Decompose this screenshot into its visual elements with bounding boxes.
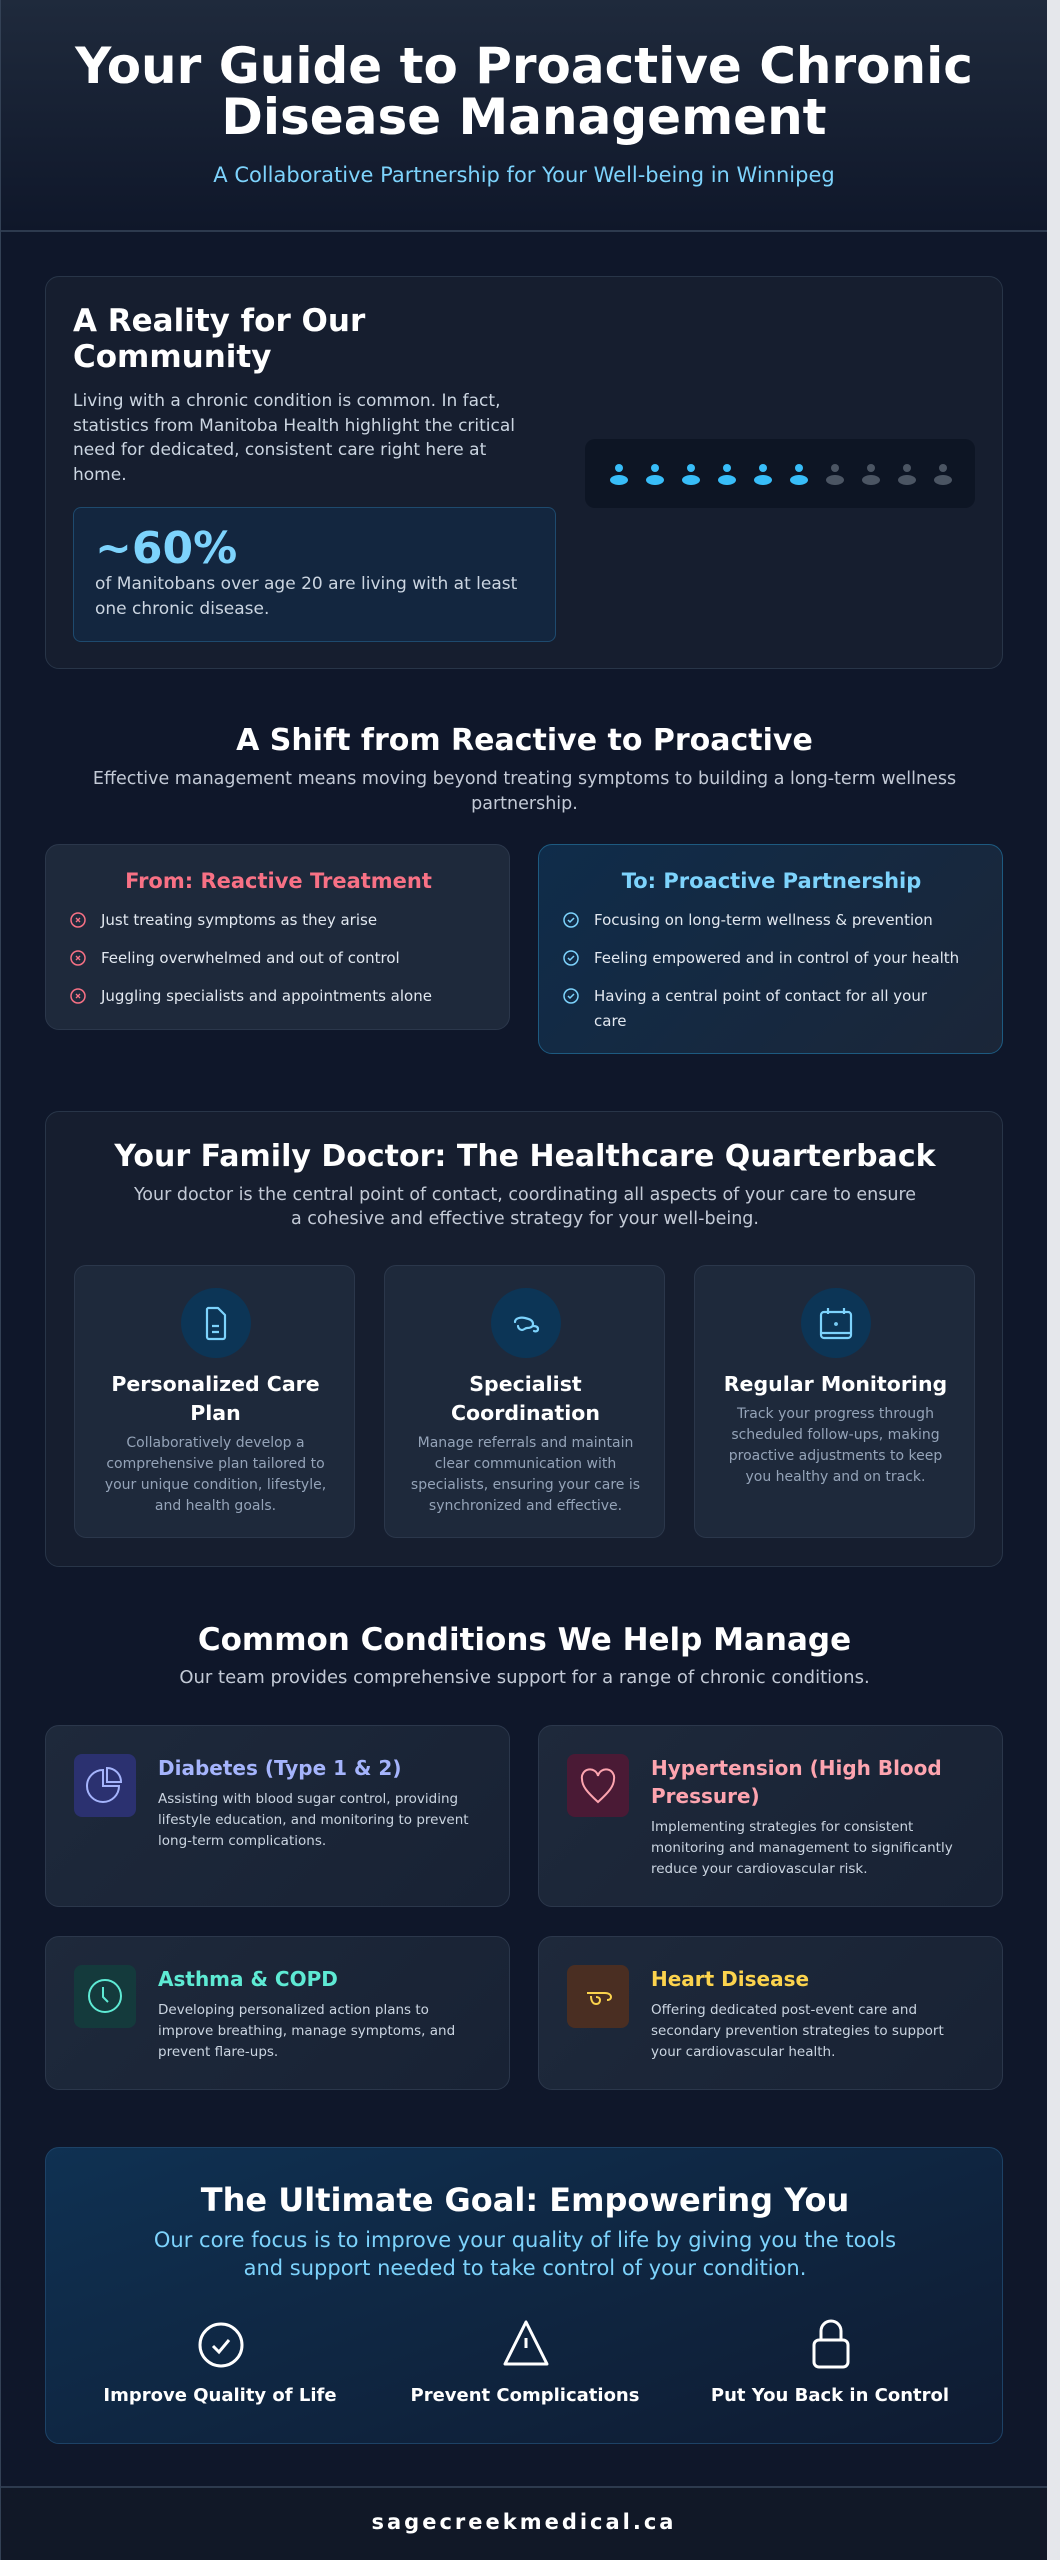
description: Track your progress through scheduled follow-ups, making proactive adjustments to keep you healthy and on track. xyxy=(729,1406,942,1485)
card: diabetes xyxy=(45,1725,510,1907)
description: Collaboratively develop a comprehensive plan tailored to your unique condition, lifestyle, and health goals. xyxy=(105,1435,326,1514)
title: Asthma & COPD xyxy=(158,1967,338,1991)
description: Offering dedicated post-event care and secondary prevention strategies to support your cardiovascular health. xyxy=(651,2002,944,2060)
icon: clock xyxy=(74,1965,136,2028)
description: Manage referrals and maintain clear communication with specialists, ensuring your care is synchronized and effective. xyxy=(411,1435,640,1514)
list: Feeling overwhelmed and out of control xyxy=(101,949,400,967)
panel: community reality xyxy=(45,276,1003,669)
title: Diabetes (Type 1 & 2) xyxy=(158,1756,401,1780)
title xyxy=(74,37,973,146)
list: Just treating symptoms as they arise xyxy=(101,911,377,929)
heading: shift: A Shift from Reactive to Proactive xyxy=(236,723,813,758)
title: Personalized Care Plan xyxy=(111,1372,320,1425)
stat text: of Manitobans over age 20 are living with at least one chronic disease. xyxy=(95,574,517,618)
icon: pie xyxy=(74,1754,136,1817)
title: Hypertension (High Blood Pressure) xyxy=(651,1756,942,1808)
heading: A Reality for Our Community xyxy=(73,303,365,375)
icon: warning xyxy=(503,2320,548,2366)
panel: ultimate goal xyxy=(45,2147,1003,2444)
panel: reactive xyxy=(45,844,510,1030)
card: asthma xyxy=(45,1936,510,2090)
subtitle: conditions: Our team provides comprehensive support for a range of chronic conditions. xyxy=(179,1667,870,1688)
footer url: sagecreekmedical.ca xyxy=(372,2510,676,2534)
card: personalized care plan xyxy=(74,1265,355,1538)
list: Having a central point of contact for all your care xyxy=(594,987,927,1030)
title: Your Guide to Proactive Chronic xyxy=(75,37,973,95)
label: Prevent Complications xyxy=(411,2385,639,2406)
description: Developing personalized action plans to improve breathing, manage symptoms, and prevent flare-ups. xyxy=(158,2002,455,2060)
label: Put You Back in Control xyxy=(711,2385,949,2406)
stat callout xyxy=(73,507,556,642)
stat number: ~60% xyxy=(95,523,237,574)
list xyxy=(70,911,432,1005)
list: Feeling empowered and in control of your health xyxy=(594,949,959,967)
card: hypertension xyxy=(538,1725,1003,1907)
description: Assisting with blood sugar control, providing lifestyle education, and monitoring to prevent long-term complications. xyxy=(158,1791,469,1849)
goal: control xyxy=(711,2320,949,2406)
list: Juggling specialists and appointments alone xyxy=(101,987,432,1005)
list: Focusing on long-term wellness & prevention xyxy=(594,911,933,929)
description: Implementing strategies for consistent monitoring and management to significantly reduce your cardiovascular risk. xyxy=(651,1819,953,1877)
subtitle: Our core focus is to improve your quality of life by giving you the tools and support needed to take control of your condition. xyxy=(154,2228,896,2280)
card heading: From: Reactive Treatment xyxy=(125,869,432,893)
list xyxy=(563,911,959,1030)
title: Regular Monitoring xyxy=(724,1372,947,1396)
subtitle: A Collaborative Partnership for Your Well-being in Winnipeg xyxy=(213,163,835,187)
panel: proactive xyxy=(538,844,1003,1054)
heading: conditions: Common Conditions We Help Manage xyxy=(198,1622,851,1658)
heading: Your Family Doctor: The Healthcare Quarterback xyxy=(114,1139,936,1174)
subtitle: shift: Effective management means moving beyond treating symptoms to building a long-term wellness partnership. xyxy=(93,769,956,814)
icon: document xyxy=(181,1288,251,1358)
title: Specialist Coordination xyxy=(451,1372,600,1425)
goal: prevent complications xyxy=(411,2320,639,2406)
icon: heart care xyxy=(567,1965,629,2028)
panel: family doctor xyxy=(45,1111,1003,1567)
card heading: To: Proactive Partnership xyxy=(622,869,921,893)
icon: people chart xyxy=(585,439,975,508)
card: heart disease xyxy=(538,1936,1003,2090)
icon: lock xyxy=(812,2320,850,2368)
icon: check circle xyxy=(198,2322,244,2368)
paragraph: Living with a chronic condition is common. In fact, statistics from Manitoba Health highlight the critical need for dedicated, consistent care right here at home. xyxy=(73,391,515,484)
card: regular monitoring xyxy=(694,1265,975,1538)
goal: quality of life xyxy=(103,2322,337,2406)
header xyxy=(1,0,1047,232)
footer xyxy=(1,2486,1047,2560)
label: Improve Quality of Life xyxy=(103,2385,337,2406)
heading: The Ultimate Goal: Empowering You xyxy=(201,2181,849,2219)
icon: calendar xyxy=(801,1288,871,1358)
card: specialist coordination xyxy=(384,1265,665,1538)
icon: stethoscope xyxy=(491,1288,561,1358)
subtitle: Your doctor is the central point of contact, coordinating all aspects of your care to ensure a cohesive and effective strategy for your well-being. xyxy=(134,1185,916,1229)
title: Disease Management xyxy=(221,88,827,146)
icon: heart xyxy=(567,1754,629,1817)
title: Heart Disease xyxy=(651,1967,809,1991)
